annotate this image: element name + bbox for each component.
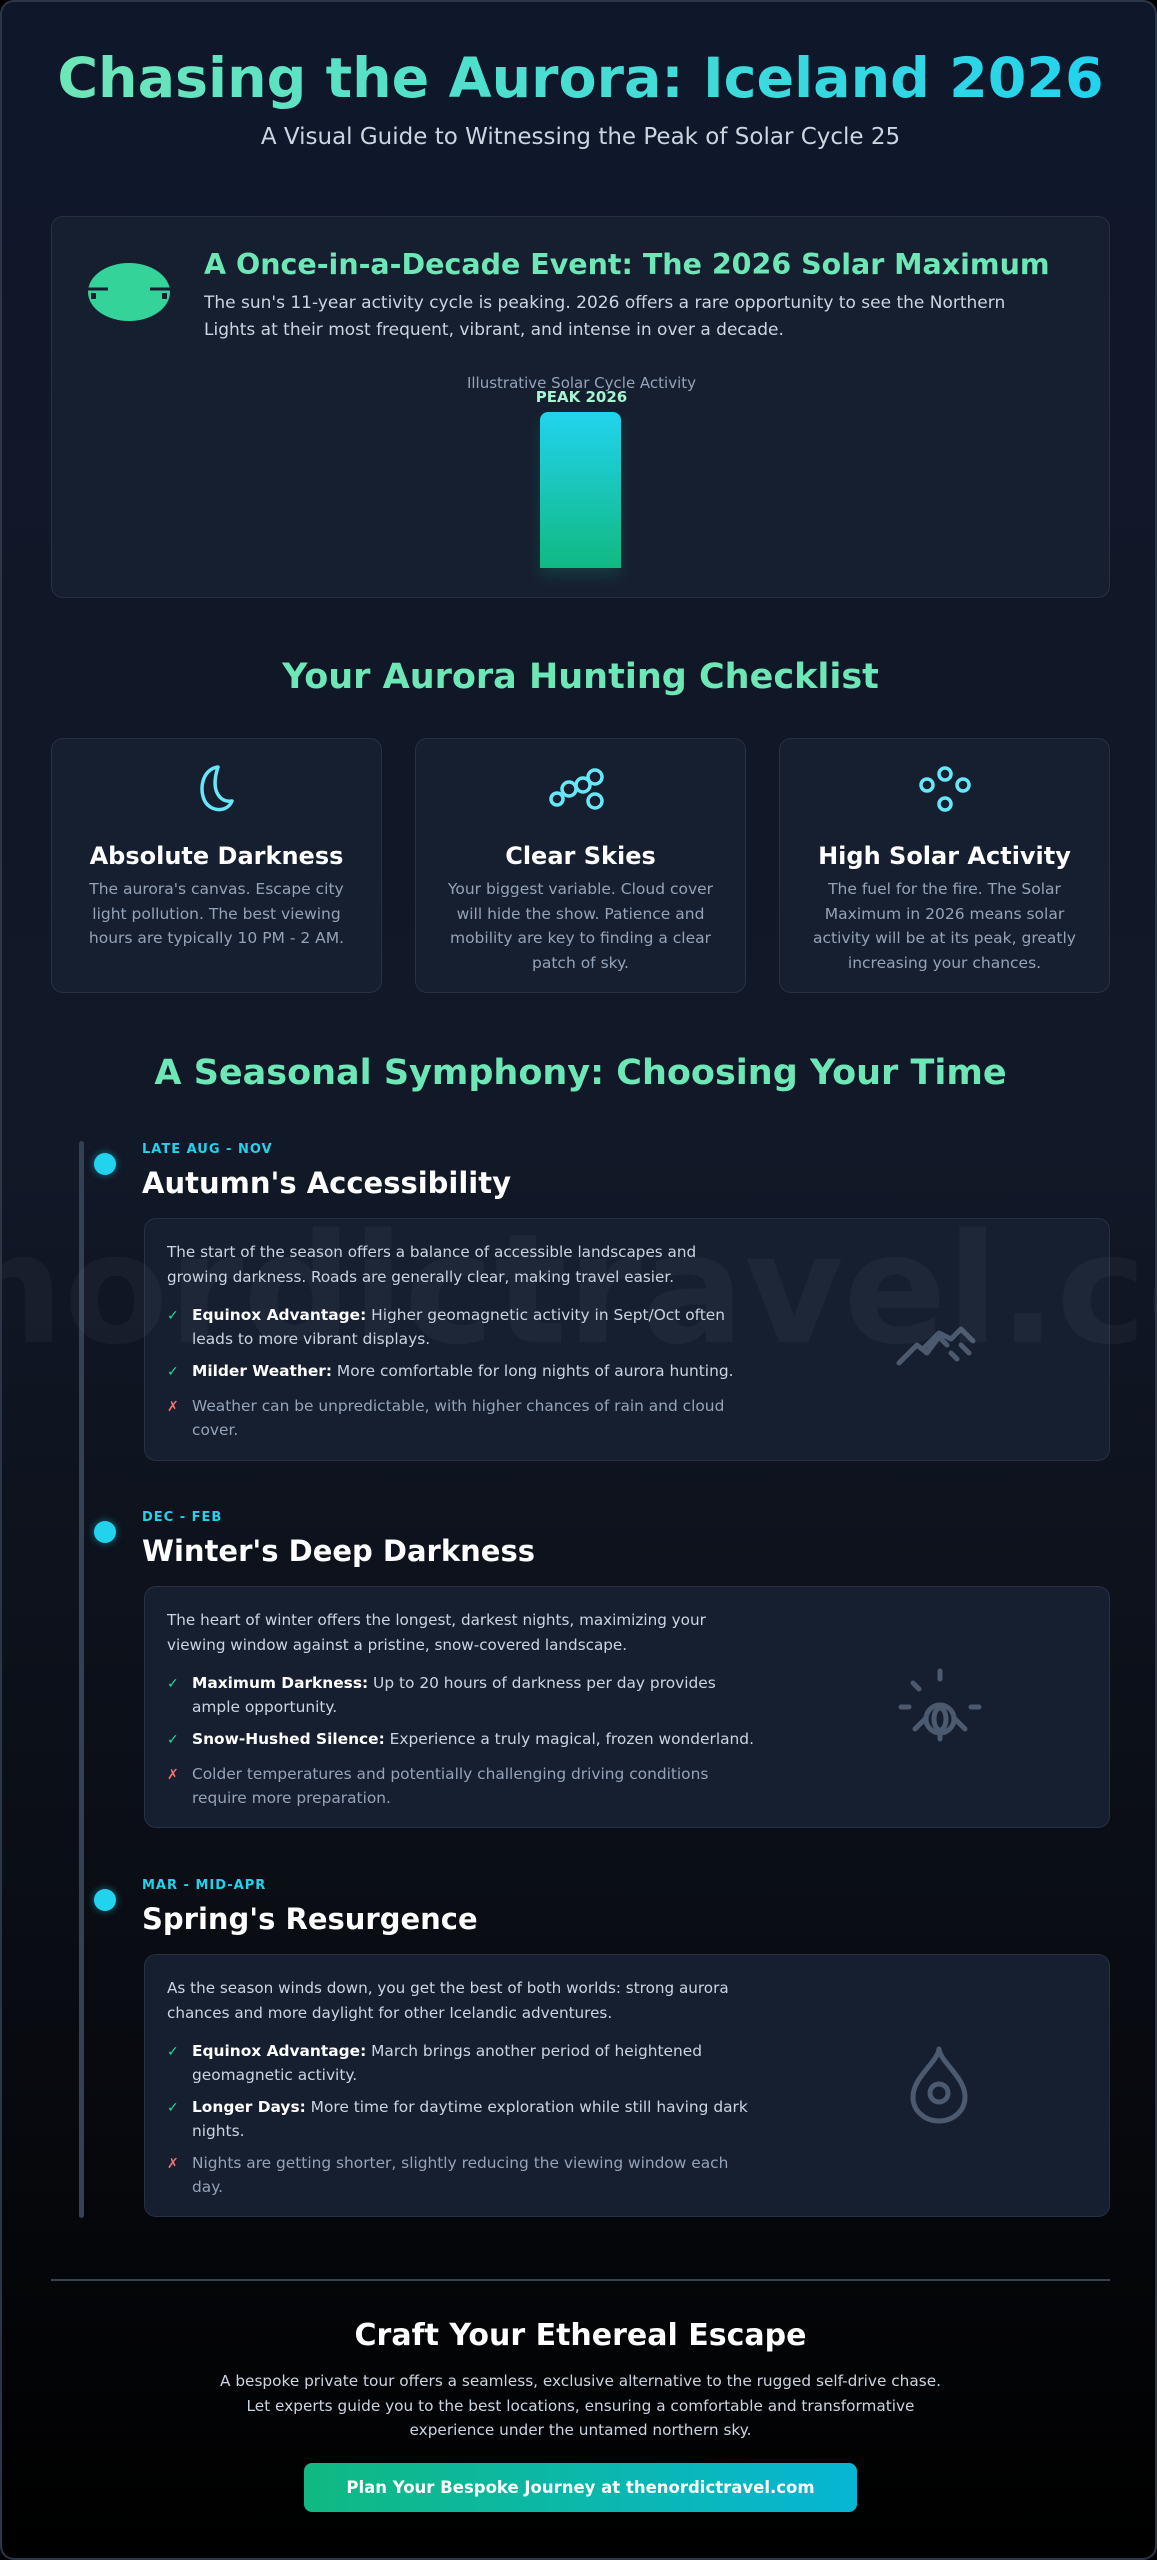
card: solar activity: High Solar Activity xyxy=(818,842,1071,870)
card: winter: Maximum Darkness: Up to 20 hours of darkness per day provides ample opportunity. xyxy=(192,1674,716,1716)
season: spring: Spring's Resurgence xyxy=(142,1902,478,1936)
card: darkness: Absolute Darkness xyxy=(90,842,343,870)
icon: moon xyxy=(200,765,234,812)
card: winter: Colder temperatures and potentially challenging driving conditions require more preparation. xyxy=(192,1765,708,1807)
card: spring xyxy=(144,1954,1110,2217)
CTA button: Plan Your Bespoke Journey at thenordictravel.com xyxy=(346,2478,815,2497)
body text: The sun's 11-year activity cycle is peaking. 2026 offers a rare opportunity to see the Northern Lights at their most frequent, vibrant, and intense in over a decade. xyxy=(204,293,1005,340)
card: autumn xyxy=(144,1218,1110,1461)
card: winter: ✓ xyxy=(167,1676,179,1692)
heading: seasons: A Seasonal Symphony: Choosing Your Time xyxy=(154,1053,1007,1093)
card: winter: ✗ xyxy=(167,1767,179,1783)
icon: drop xyxy=(910,2046,968,2124)
CTA heading: Craft Your Ethereal Escape xyxy=(355,2318,806,2353)
divider xyxy=(51,2279,1110,2281)
icon: mountains xyxy=(896,1326,976,1366)
icon: clouds xyxy=(549,768,604,810)
season: winter xyxy=(90,1510,1110,1828)
season: winter: DEC - FEB xyxy=(142,1510,222,1525)
season: autumn: Autumn's Accessibility xyxy=(142,1166,511,1200)
bar chart: Illustrative Solar Cycle Activity xyxy=(467,374,696,392)
card: autumn: ✓ xyxy=(167,1308,179,1324)
card: winter: The heart of winter offers the longest, darkest nights, maximizing your viewing window against a pristine, snow-covered landscape. xyxy=(167,1611,706,1654)
card: solar activity: The fuel for the fire. The Solar Maximum in 2026 means solar activity will be at its peak, greatly increasing your chances. xyxy=(813,880,1076,972)
card: autumn: Milder Weather: More comfortable for long nights of aurora hunting. xyxy=(192,1362,734,1380)
card: autumn: Equinox Advantage: Higher geomagnetic activity in Sept/Oct often leads to more vibrant displays. xyxy=(192,1306,725,1348)
card: spring: As the season winds down, you get the best of both worlds: strong aurora chances and more daylight for other Icelandic adventures. xyxy=(167,1979,729,2022)
season: spring: MAR - MID-APR xyxy=(142,1878,266,1893)
season: spring xyxy=(89,1878,1110,2217)
title: Chasing the Aurora: Iceland 2026 xyxy=(57,46,1104,111)
bar chart: PEAK 2026 xyxy=(536,388,627,406)
card: winter: Snow-Hushed Silence: Experience a truly magical, frozen wonderland. xyxy=(192,1730,754,1748)
icon: sunrise xyxy=(898,1668,982,1742)
card: spring: Equinox Advantage: March brings another period of heightened geomagnetic activity. xyxy=(192,2042,702,2084)
card: autumn: Weather can be unpredictable, with higher chances of rain and cloud cover. xyxy=(192,1397,724,1439)
timeline line xyxy=(79,1141,84,2218)
season: autumn: LATE AUG - NOV xyxy=(142,1142,273,1157)
card: spring: ✓ xyxy=(167,2100,179,2116)
subtitle: A Visual Guide to Witnessing the Peak of Solar Cycle 25 xyxy=(261,124,900,150)
season: winter: Winter's Deep Darkness xyxy=(142,1534,535,1568)
card: autumn: The start of the season offers a balance of accessible landscapes and growing darkness. Roads are generally clear, making travel easier. xyxy=(167,1243,696,1286)
icon: dots xyxy=(919,766,971,812)
card: winter xyxy=(144,1586,1110,1828)
season: autumn xyxy=(90,1142,1110,1461)
icon: sun xyxy=(88,263,170,321)
card: darkness xyxy=(51,738,382,993)
card: spring: Longer Days: More time for daytime exploration while still having dark nights. xyxy=(192,2098,748,2140)
heading: checklist: Your Aurora Hunting Checklist xyxy=(282,657,879,697)
card: clear skies: Your biggest variable. Cloud cover will hide the show. Patience and mobility are key to finding a clear patch of sky. xyxy=(448,880,713,972)
card: spring: ✗ xyxy=(167,2156,179,2172)
card: winter: ✓ xyxy=(167,1732,179,1748)
bar chart xyxy=(467,374,696,579)
card: solar activity xyxy=(779,738,1110,993)
card: spring: ✓ xyxy=(167,2044,179,2060)
card: clear skies: Clear Skies xyxy=(505,842,656,870)
card: clear skies xyxy=(415,738,746,993)
card: autumn: ✗ xyxy=(167,1399,179,1415)
heading: A Once-in-a-Decade Event: The 2026 Solar Maximum xyxy=(204,248,1050,281)
CTA text: A bespoke private tour offers a seamless, exclusive alternative to the rugged self-drive chase. Let experts guide you to the best locations, ensuring a comfortable and transformative experience under the untamed northern sky. xyxy=(220,2372,941,2439)
card: darkness: The aurora's canvas. Escape city light pollution. The best viewing hours are typically 10 PM - 2 AM. xyxy=(89,880,344,947)
card: spring: Nights are getting shorter, slightly reducing the viewing window each day. xyxy=(192,2154,728,2196)
card: autumn: ✓ xyxy=(167,1364,179,1380)
CTA button xyxy=(304,2463,857,2512)
panel: solar maximum xyxy=(51,216,1110,598)
